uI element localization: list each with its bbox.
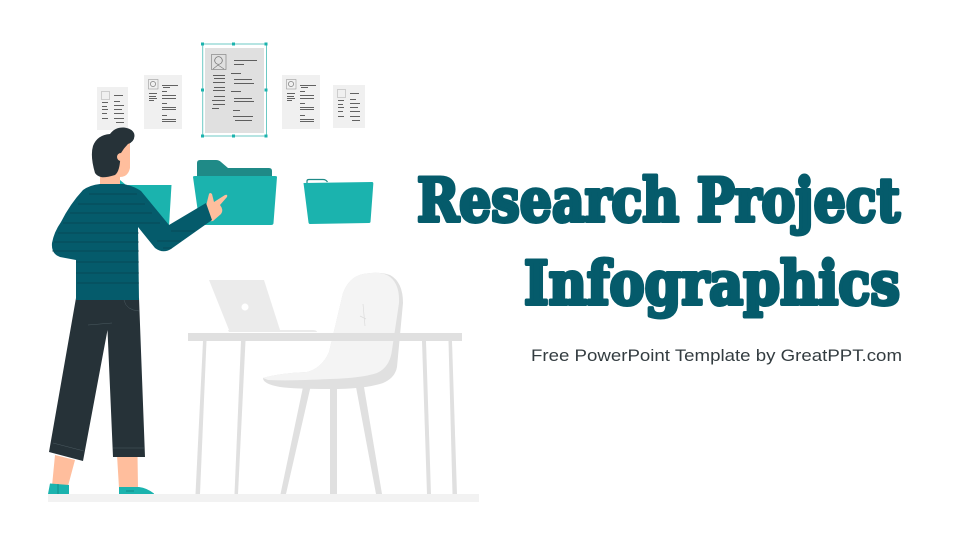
collar [120,180,126,186]
laptop [209,280,317,332]
sweater [52,184,212,300]
desk [188,333,462,494]
chair legs [280,387,382,494]
right folder [304,180,373,224]
chair [263,273,403,494]
chair shell light [263,273,399,380]
person [48,127,227,494]
shoes [48,484,154,494]
document 2 [144,75,182,129]
document 3 selected, with selection frame [201,42,268,138]
document 1 [97,87,128,130]
trousers [49,298,145,461]
hair [92,127,134,177]
title [417,166,900,319]
sweater stripes [52,194,195,283]
folder behind the person [128,185,172,226]
legs [52,455,138,488]
neck and face [100,142,130,187]
floor [48,494,479,502]
chair shell shadow [263,273,403,389]
document 5 [333,85,365,128]
subtitle: Free PowerPoint Template by GreatPPT.com [531,346,902,365]
title line 2: Infographics [524,249,900,319]
hand [206,193,227,221]
centre folder [193,160,277,225]
document 4 [282,75,320,129]
ear [117,153,125,161]
